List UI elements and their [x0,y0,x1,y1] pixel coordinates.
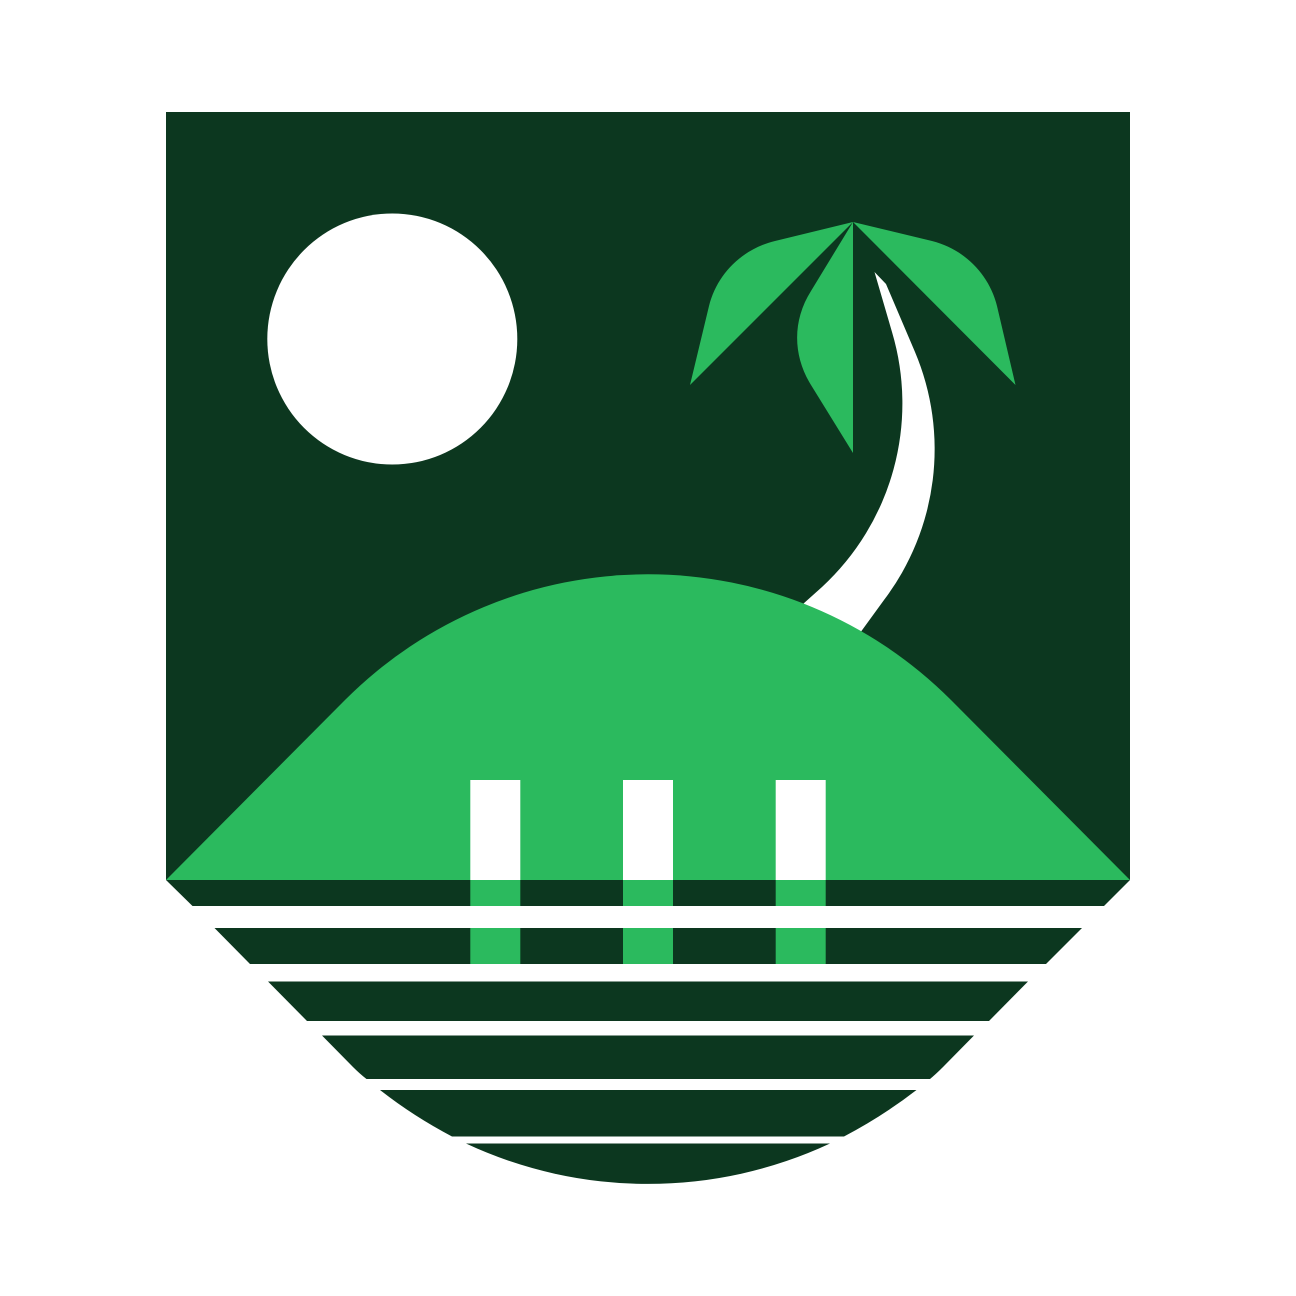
pillar 2 [623,780,673,964]
left palm leaf [690,222,853,385]
stripe 2 [214,928,1082,964]
stripe 1 [166,880,1130,906]
stripe 4 [322,1036,974,1079]
panel: dark green sky [166,112,1130,880]
green hill [166,574,1130,880]
bars: three pillars [470,780,826,964]
icon: white moon [267,214,517,464]
icon: palm tree [690,222,1016,633]
stripe 5 [380,1090,916,1136]
stripe 3 [268,982,1028,1021]
water stripes [166,880,1130,1184]
palm trunk [803,272,935,633]
stripe 6 [466,1144,830,1184]
centre palm leaf [797,222,853,453]
pillar 3 [776,780,826,964]
pillar 1 [470,780,520,964]
right palm leaf [853,222,1016,385]
